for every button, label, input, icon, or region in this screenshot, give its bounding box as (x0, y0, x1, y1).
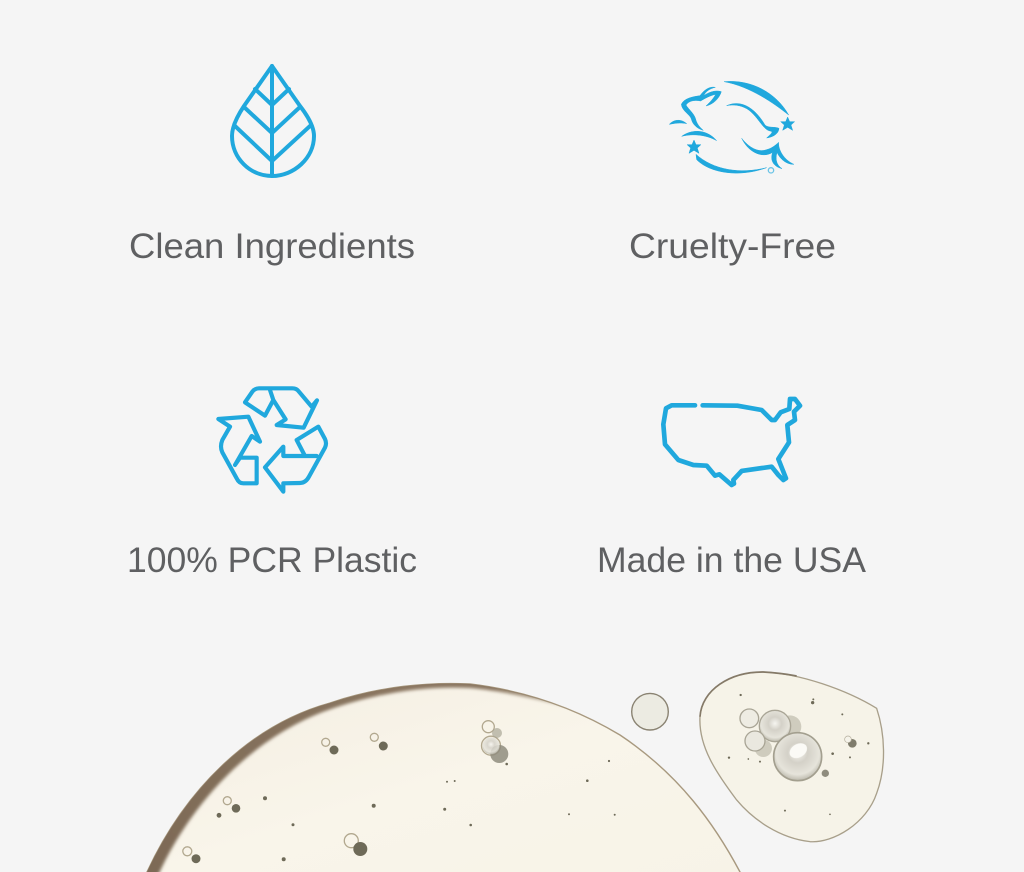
large oil droplet (140, 679, 744, 872)
icon: recycling arrows (218, 388, 326, 492)
label: cruelty-free: Cruelty-Free (629, 227, 836, 266)
panel: clean ingredients (129, 66, 415, 266)
panel: recycled plastic (127, 388, 417, 580)
image: oil droplets (140, 672, 884, 872)
infographic canvas (130, 64, 884, 872)
panel: cruelty-free (629, 81, 836, 266)
label: made in the USA: Made in the USA (597, 541, 867, 580)
icon: leaf drop (232, 66, 314, 176)
icon: USA outline (663, 399, 800, 485)
small round droplet (632, 693, 668, 730)
icon: leaping bunny (669, 81, 795, 173)
label: 100% PCR plastic: 100% PCR Plastic (127, 541, 417, 580)
panel: made in the USA (597, 399, 867, 580)
label: clean ingredients: Clean Ingredients (129, 227, 415, 266)
teardrop oil droplet (700, 672, 884, 842)
